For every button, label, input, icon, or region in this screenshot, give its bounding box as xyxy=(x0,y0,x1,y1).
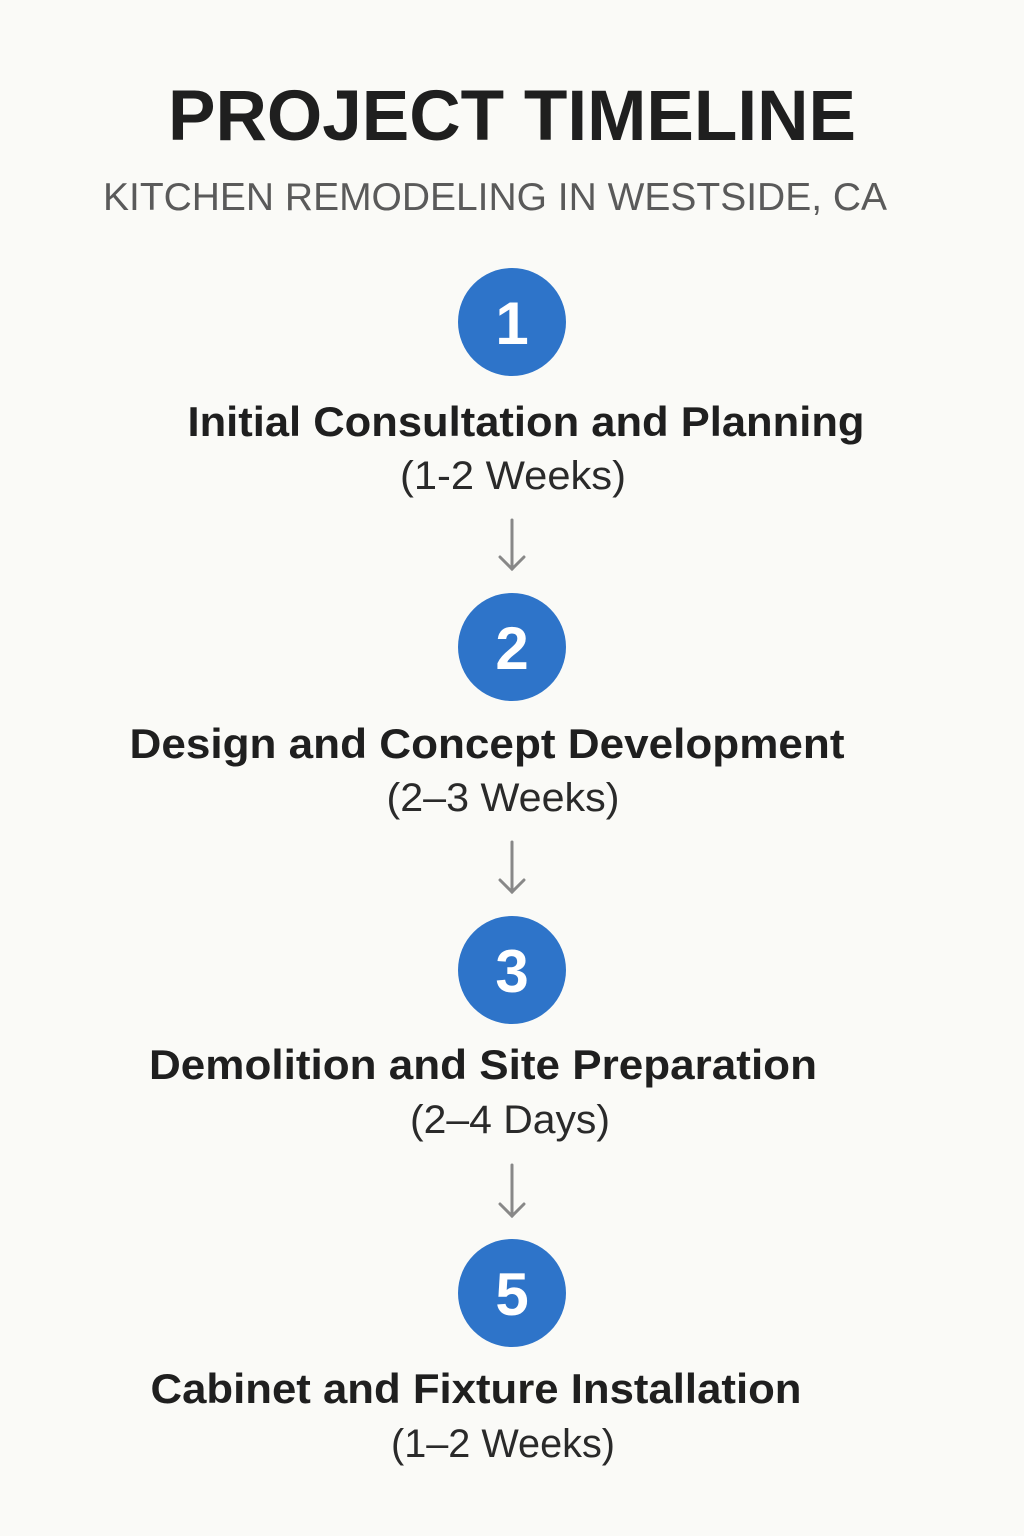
step 2 xyxy=(130,593,845,820)
icon: step 3 circle: 3 xyxy=(495,938,529,1005)
arrow 2 xyxy=(500,842,524,892)
icon: step 2 circle: 2 xyxy=(495,615,529,682)
step 1 duration: (1-2 Weeks) xyxy=(400,454,626,498)
subtitle: KITCHEN REMODELING IN WESTSIDE, CA xyxy=(103,176,887,219)
step 5 xyxy=(150,1239,802,1466)
step 3 duration: (2–4 Days) xyxy=(410,1098,610,1142)
arrow 3 xyxy=(500,1165,524,1216)
icon: step 1 circle xyxy=(458,268,566,376)
arrow 1 xyxy=(500,520,524,569)
step 2 duration: (2–3 Weeks) xyxy=(386,776,620,820)
title: PROJECT TIMELINE xyxy=(168,77,856,156)
step 5 duration: (1–2 Weeks) xyxy=(391,1422,615,1466)
icon: step 5 circle xyxy=(458,1239,566,1347)
step 1 xyxy=(188,268,864,498)
step 1 title: Initial Consultation and Planning xyxy=(188,398,864,445)
icon: step 5 circle: 5 xyxy=(495,1261,529,1328)
icon: step 2 circle xyxy=(458,593,566,701)
step 2 title: Design and Concept Development xyxy=(130,720,845,767)
step 3 xyxy=(149,916,817,1142)
step 5 title: Cabinet and Fixture Installation xyxy=(150,1365,802,1412)
step 3 title: Demolition and Site Preparation xyxy=(149,1041,817,1088)
icon: step 1 circle: 1 xyxy=(495,290,529,357)
icon: step 3 circle xyxy=(458,916,566,1024)
